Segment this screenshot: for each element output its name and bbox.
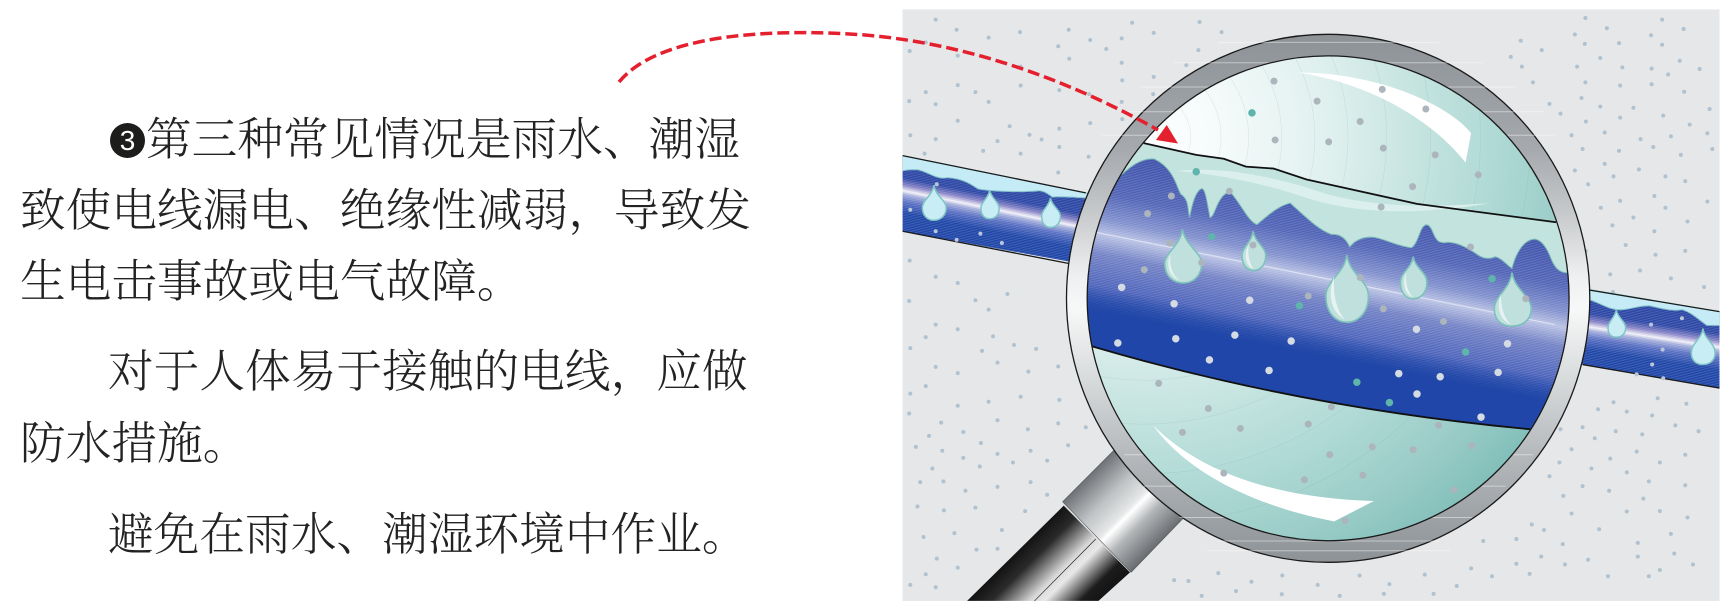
water drops on magnified wire bbox=[1165, 229, 1531, 326]
rim banding bbox=[1102, 42, 1555, 551]
magnifier glass bbox=[1088, 56, 1568, 540]
wire outlines bbox=[1144, 143, 1556, 222]
text line: 生电击事故或电气故障。 bbox=[20, 256, 523, 307]
wire segment right bbox=[1582, 300, 1720, 388]
wire segment left bbox=[903, 156, 1719, 388]
illustration: magnified wet wire under a magnifying glass bbox=[618, 10, 1720, 602]
concentric glass rings bbox=[1100, 56, 1529, 516]
text line: 对于人体易于接触的电线，应做 bbox=[108, 346, 748, 397]
water film on left wire bbox=[903, 156, 1097, 198]
wire hatching bbox=[1088, 160, 1568, 395]
specks: teal bbox=[1196, 113, 1492, 403]
glass inner outline bbox=[1087, 56, 1569, 541]
specks on wires bbox=[910, 184, 1682, 378]
icon: magnifier rim bbox=[1066, 34, 1590, 562]
highlight: lower glass reflection bbox=[1153, 425, 1374, 521]
text line: 防水措施。 bbox=[20, 418, 248, 469]
text line with circled number 3: 第三种常见情况是雨水、潮湿 bbox=[146, 114, 740, 165]
water drops on right wire bbox=[1608, 310, 1715, 365]
icon: circled number 3: 3 bbox=[120, 125, 135, 156]
icon: circled number 3 bbox=[110, 123, 145, 158]
water drops on left wire bbox=[922, 185, 1060, 227]
text line: 致使电线漏电、绝缘性减弱，导致发 bbox=[20, 185, 751, 236]
text block: explanation paragraphs bbox=[20, 114, 751, 560]
specks on wire: white bbox=[1118, 287, 1508, 417]
specks on glass: grey bbox=[1144, 81, 1526, 521]
highlight stripe on wire bbox=[1097, 232, 1555, 325]
magnified wire body bbox=[1088, 159, 1568, 400]
background speckles bbox=[909, 18, 1712, 596]
icon: black handle tube bbox=[967, 506, 1130, 601]
arrow: red dashed curve pointing into lens bbox=[619, 33, 1178, 143]
icon: silver handle collar bbox=[1063, 451, 1184, 572]
highlight: upper glass reflection bbox=[1298, 73, 1471, 163]
solid dark lower band of wire bbox=[1088, 288, 1553, 428]
text line: 避免在雨水、潮湿环境中作业。 bbox=[108, 509, 748, 560]
panel: grey background bbox=[903, 9, 1719, 601]
water film on magnified wire bbox=[1120, 143, 1568, 274]
lighter water streak bbox=[1177, 170, 1492, 211]
water film on right wire bbox=[1590, 289, 1720, 326]
